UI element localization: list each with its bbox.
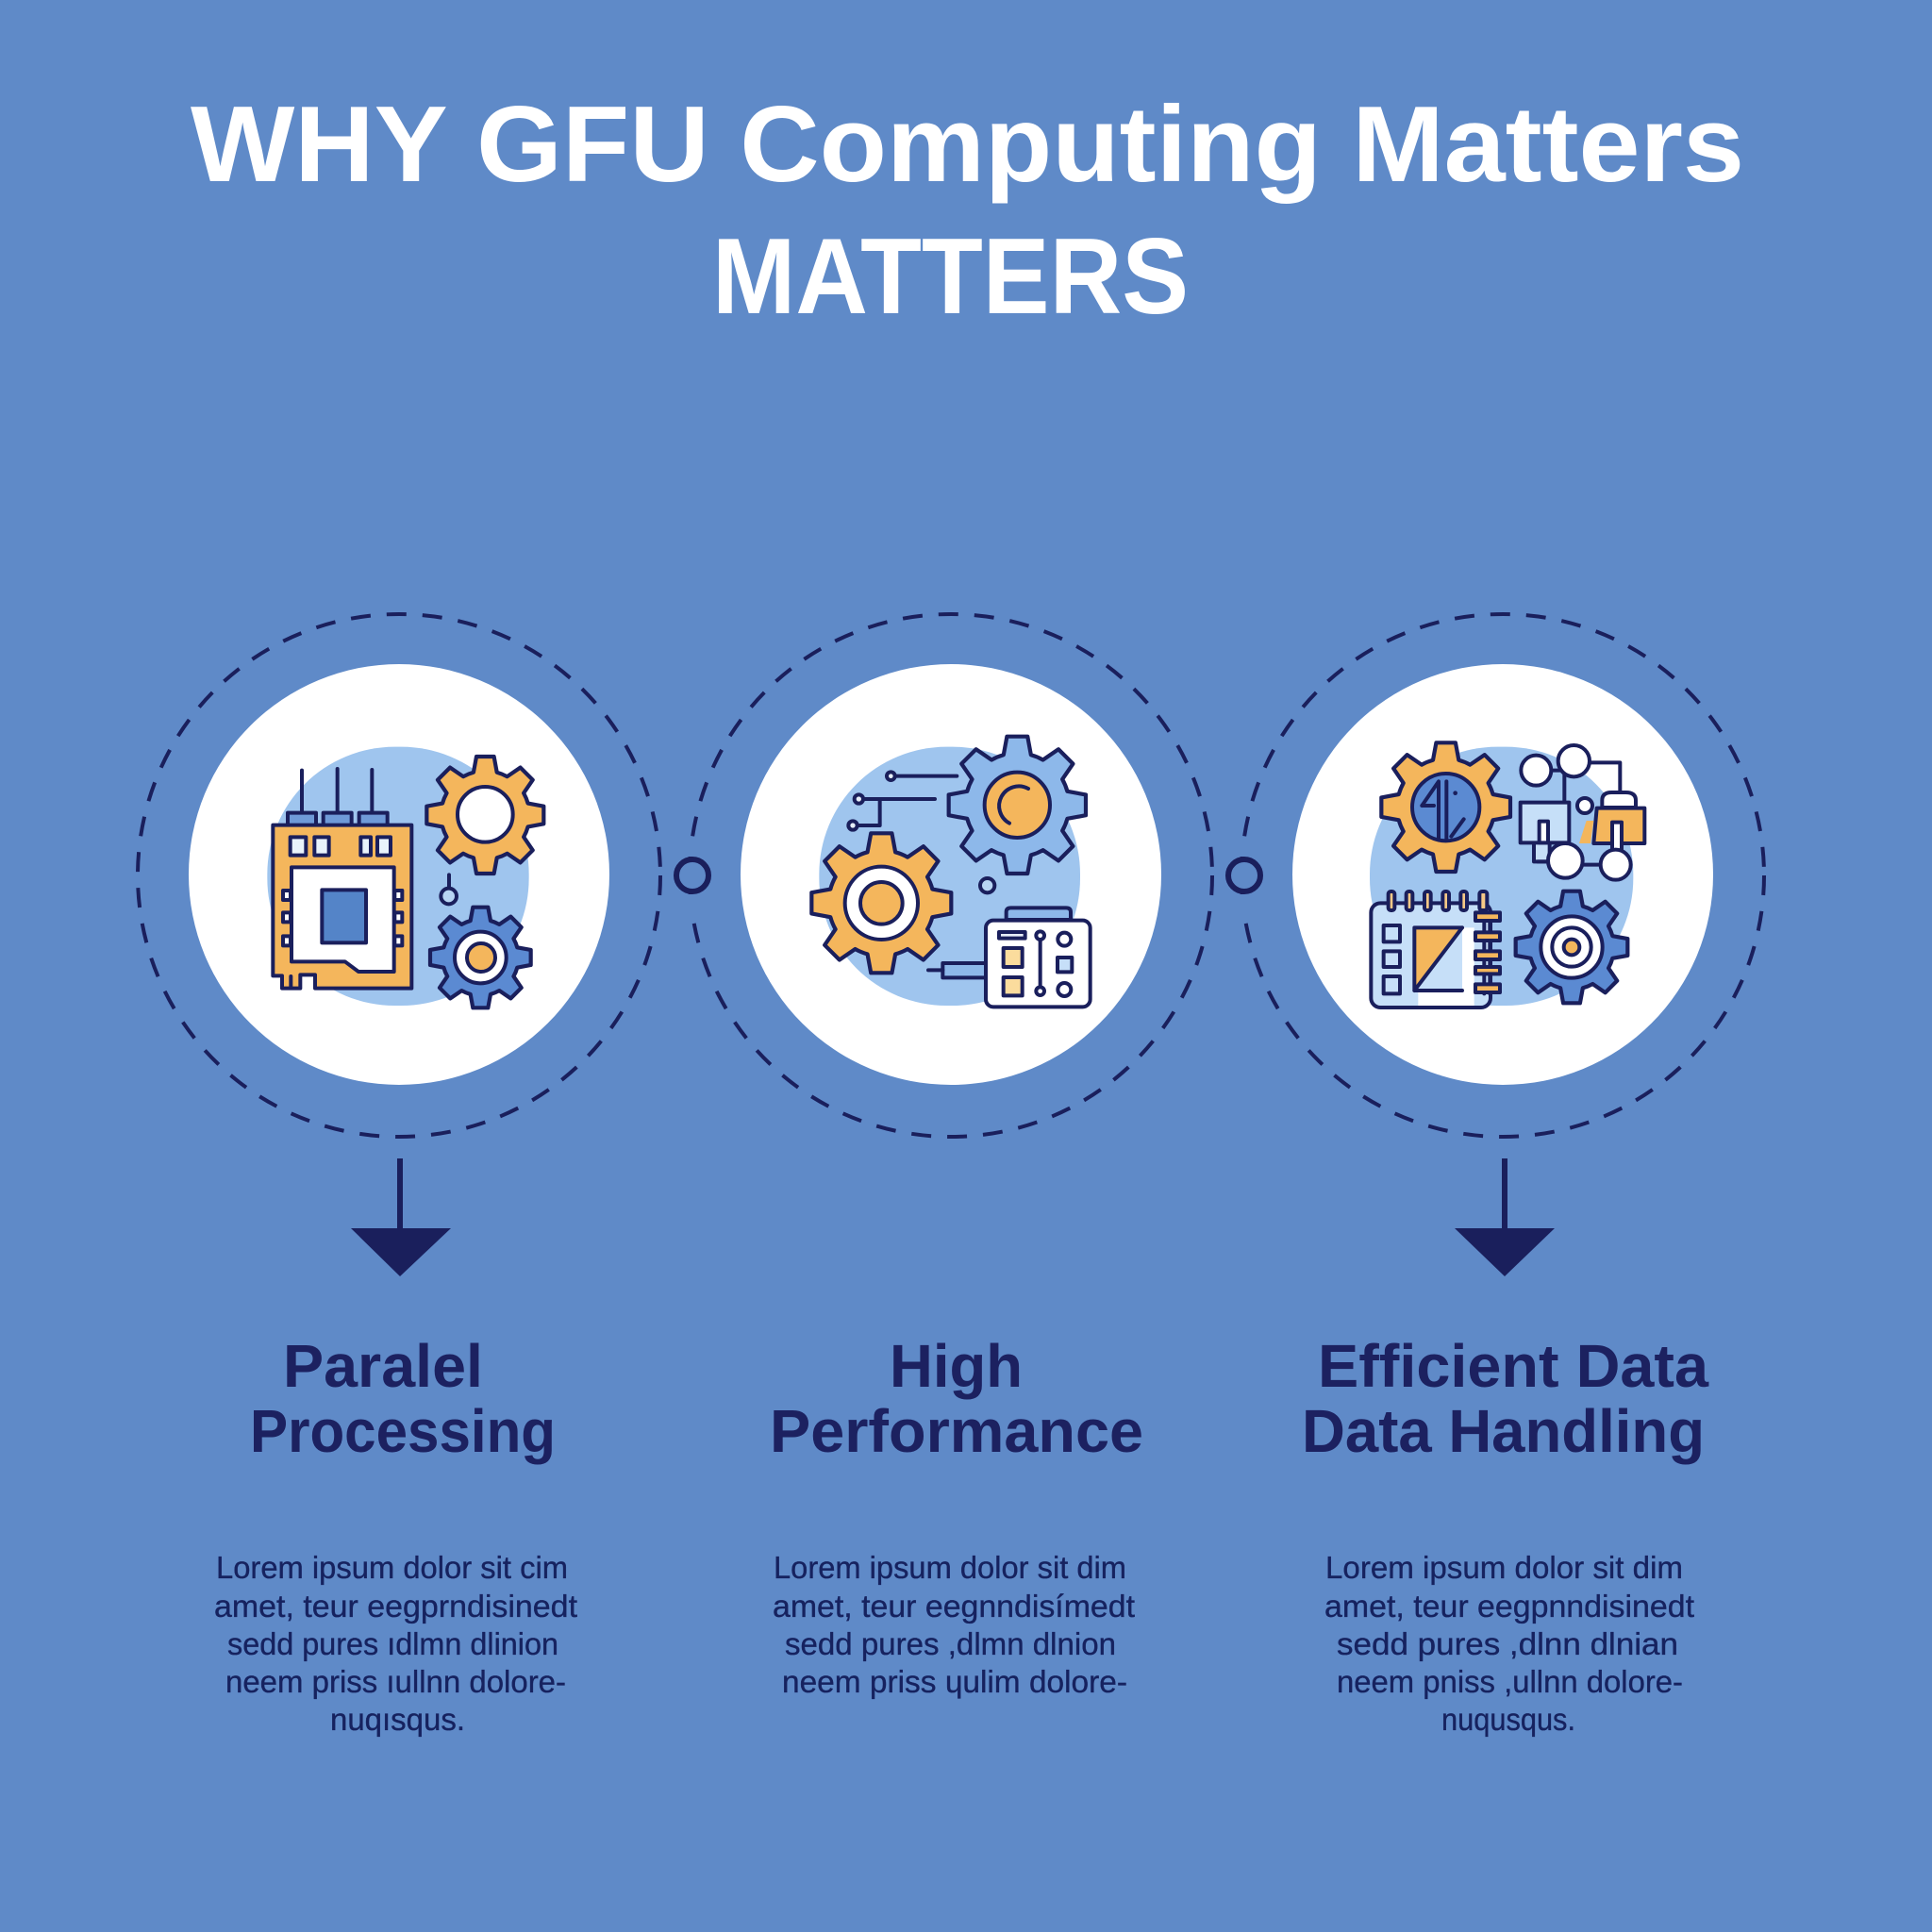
heading 1: Paralel [283, 1332, 483, 1400]
heading 2: Performance [770, 1397, 1143, 1465]
text block 2: sedd pures ,dlmn dlnion [785, 1626, 1116, 1661]
text block 3: nuqusqus. [1441, 1702, 1575, 1737]
heading 2: High [890, 1332, 1023, 1400]
heading 2 [770, 1332, 1143, 1465]
text block 2: neem priss ɥulim dolore- [782, 1664, 1127, 1699]
heading 1 [250, 1332, 556, 1465]
text block 1: neem priss ıullnn dolore- [225, 1664, 566, 1699]
icon: gears and control panel [811, 737, 1091, 1007]
text block 3: Lorem ipsum dolor sit dim [1325, 1550, 1683, 1585]
text block 2: Lorem ipsum dolor sit dim [774, 1550, 1126, 1585]
text block 1: sedd pures ıdlmn dlinion [227, 1626, 558, 1661]
icon: circuit board and gears [267, 747, 543, 1008]
dashed ring 2 [690, 614, 1212, 1137]
text block 3 [1324, 1550, 1694, 1737]
panel: efficient data handling [1241, 614, 1764, 1737]
panel: parallel processing [138, 614, 660, 1737]
title: MATTERS [712, 217, 1189, 337]
title [191, 85, 1744, 337]
text block 2: amet, teur eegnndisímedt [773, 1589, 1135, 1624]
heading 1: Processing [250, 1397, 556, 1465]
arrow 3 [1455, 1158, 1555, 1276]
white disc 3 [1292, 664, 1713, 1085]
dashed ring 1 [138, 614, 660, 1137]
text block 2 [773, 1550, 1135, 1699]
dashed ring 3 [1241, 614, 1764, 1137]
title: WHY GFU Computing Matters [191, 85, 1744, 205]
heading 3 [1302, 1332, 1708, 1465]
text block 1: amet, teur eegprndisinedt [214, 1589, 577, 1624]
text block 3: neem pniss ,ullnn dolore- [1337, 1664, 1683, 1699]
text block 1: Lorem ipsum dolor sit cim [216, 1550, 568, 1585]
text block 3: sedd pures ,dlnn dlnian [1337, 1626, 1678, 1661]
heading 3: Data Handling [1302, 1397, 1705, 1465]
connector ring left [676, 859, 708, 891]
text block 1: nuqısqus. [330, 1702, 465, 1737]
white disc 1 [189, 664, 609, 1085]
arrow 1 [351, 1158, 451, 1276]
connector ring right [1228, 859, 1260, 891]
connector gap right [1233, 841, 1254, 909]
heading 3: Efficient Data [1318, 1332, 1708, 1400]
icon: data gears and network [1370, 742, 1644, 1008]
connector gap left [681, 841, 702, 909]
text block 1 [214, 1550, 577, 1737]
white disc 2 [741, 664, 1161, 1085]
panel: high performance [690, 614, 1212, 1699]
text block 3: amet, teur eegpnndisinedt [1324, 1589, 1694, 1624]
